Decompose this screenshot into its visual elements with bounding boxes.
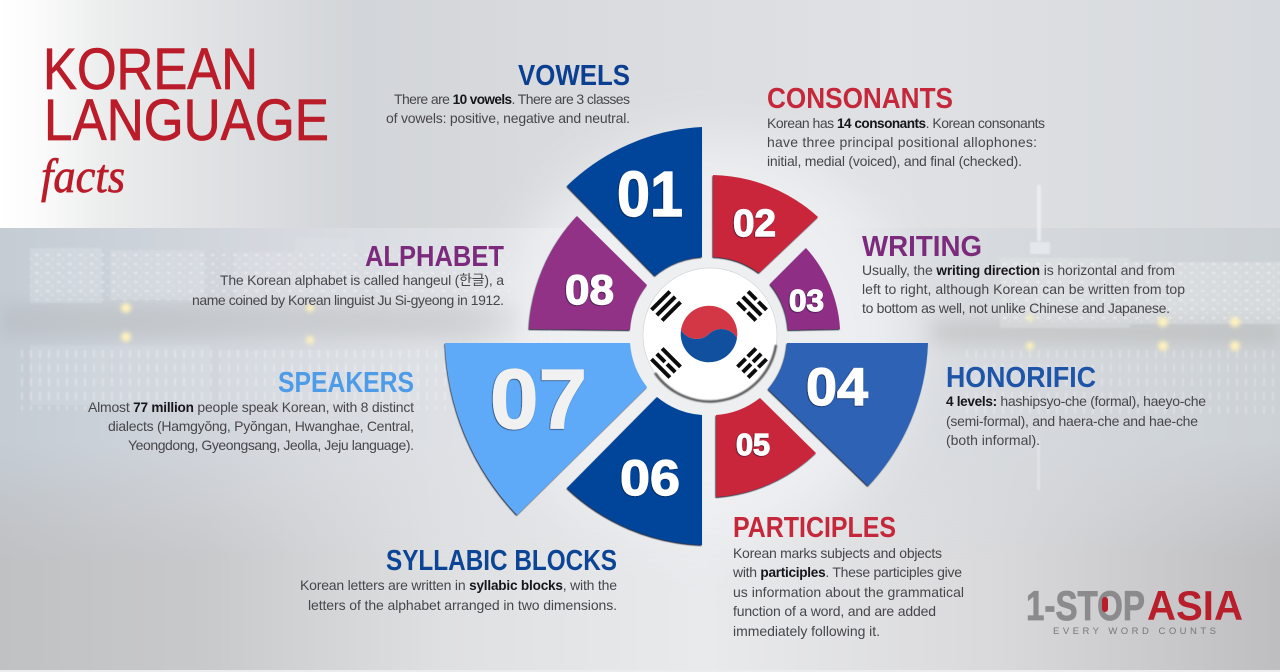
text block: speakers [88,367,414,453]
text block: participles: function of a word, and are added [733,603,936,619]
text block: syllabic blocks [300,545,617,613]
text block: speakers: SPEAKERS [278,367,414,399]
trigram upper left [650,290,682,322]
text block: alphabet: name coined by Korean linguist Ju Si-gyeong in 1912. [192,292,504,308]
title [41,37,329,203]
text block: consonants: Korean has 14 consonants. Korean consonants [767,115,1045,131]
segment 08 [529,216,647,330]
text block: honorific: (semi-formal), and haera-che and hae-che [946,413,1198,429]
title: LANGUAGE [44,88,329,153]
text block: participles [732,512,964,639]
segment 04: 04 [806,358,869,417]
logo: EVERY WORD COUNTS [1053,626,1216,637]
text block: writing: WRITING [862,231,982,263]
segment 07 [445,343,647,515]
text block: writing [862,231,1185,316]
text block: honorific: 4 levels: hashipsyo-che (formal), haeyo-che [946,393,1206,409]
text block: participles: PARTICIPLES [733,512,896,544]
trigram lower right [736,347,768,379]
text block: consonants: initial, medial (voiced), and final (checked). [767,153,1022,169]
text block: honorific: HONORIFIC [946,362,1096,394]
segment 03 [770,248,840,330]
text block: participles: us information about the grammatical [733,584,964,600]
text block: syllabic blocks: letters of the alphabet arranged in two dimensions. [308,597,617,613]
logo: ASIA [1147,582,1243,629]
segment 04 [768,343,928,486]
text block: vowels: There are 10 vowels. There are 3 classes [394,91,630,107]
text block: participles: immediately following it. [733,623,880,639]
text block: alphabet: The Korean alphabet is called hangeul (한글), a [220,272,504,288]
segment 07: 07 [490,352,587,446]
text block: consonants [767,83,1045,169]
segment 08: 08 [565,266,614,313]
segment 05: 05 [736,427,770,462]
text block: speakers: dialects (Hamgyŏng, Pyŏngan, Hwanghae, Central, [108,418,414,434]
title: KOREAN [43,37,258,102]
text block: speakers: Yeongdong, Gyeongsang, Jeolla, Jeju language). [128,437,414,453]
segment 06 [567,397,702,545]
text block: honorific [946,362,1206,448]
text block: vowels: VOWELS [518,60,630,92]
segment 03: 03 [789,283,824,318]
city skyline photo [0,185,1280,490]
light glow behind wheel [503,135,913,545]
text block: speakers: Almost 77 million people speak Korean, with 8 distinct [88,399,414,415]
text block: writing: Usually, the writing direction is horizontal and from [862,262,1175,278]
segment 02: 02 [733,203,776,245]
text block: honorific: (both informal). [946,432,1040,448]
text block: vowels [386,60,630,126]
segment 06: 06 [620,450,680,506]
text block: consonants: have three principal positional allophones: [767,134,1037,150]
text block: syllabic blocks: SYLLABIC BLOCKS [386,545,617,577]
segment 05 [716,398,816,497]
text block: vowels: of vowels: positive, negative and neutral. [386,110,630,126]
logo [1026,582,1243,637]
icon: Korean flag [643,268,777,402]
text block: participles: with participles. These participles give [732,564,962,580]
segment 01: 01 [617,158,683,230]
text block: alphabet [192,241,504,308]
text block: writing: left to right, although Korean can be written from top [862,281,1185,297]
taegeuk [681,306,737,362]
trigram upper right [736,290,768,322]
segment 02 [713,175,818,273]
segment 01 [567,127,702,276]
text block: alphabet: ALPHABET [365,241,504,273]
text block: syllabic blocks: Korean letters are written in syllabic blocks, with the [300,577,617,593]
text block: writing: to bottom as well, not unlike Chinese and Japanese. [862,300,1170,316]
text block: consonants: CONSONANTS [767,83,953,115]
title: facts [41,150,125,203]
text block: participles: Korean marks subjects and objects [733,545,942,561]
logo: 1-STOP [1026,582,1145,629]
trigram lower left [650,347,682,379]
wheel diagram [445,127,928,545]
